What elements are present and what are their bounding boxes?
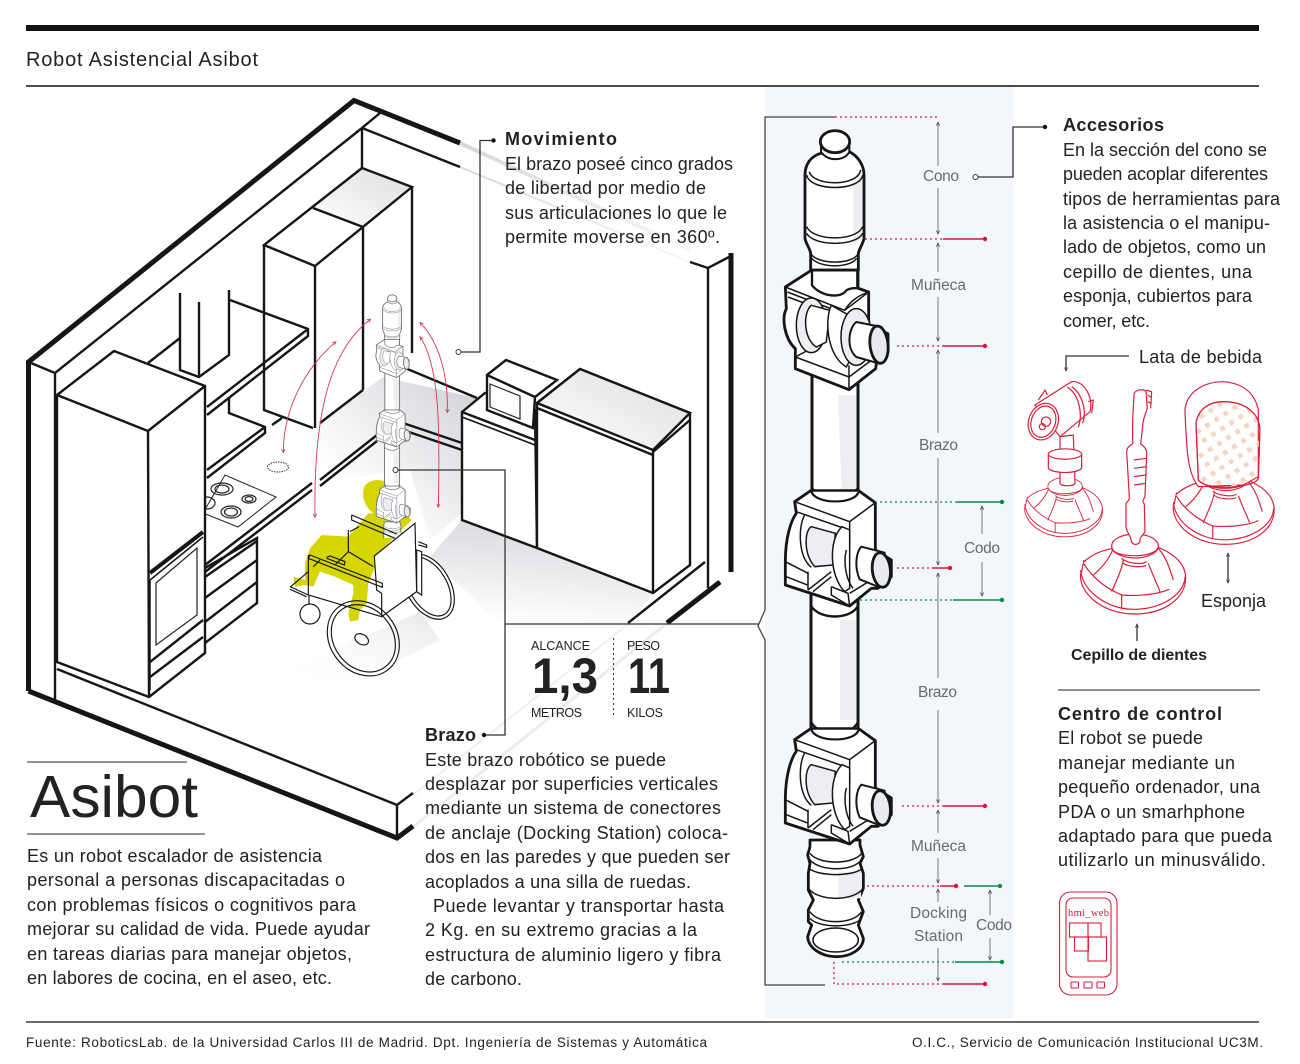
part labels: Cono <box>923 168 959 185</box>
heading: Asibot with intro text <box>27 762 370 988</box>
icon: sponge holder <box>1173 382 1274 544</box>
text block: centro de control: PDA o un smarhphone <box>1058 802 1245 822</box>
text block: brazo: Puede levantar y transportar hasta <box>433 896 725 916</box>
text block: centro de control: El robot se puede <box>1058 728 1203 748</box>
text block: brazo: dos en las paredes y que pueden ser <box>425 847 730 867</box>
part labels: Brazo <box>919 437 958 454</box>
docking station <box>808 840 863 957</box>
joint middle <box>785 491 892 606</box>
part labels: Muñeca <box>911 838 966 855</box>
page title: Robot Asistencial Asibot <box>26 49 258 71</box>
text block: brazo: Brazo <box>425 725 476 745</box>
callout: movimiento: El brazo poseé cinco grados <box>505 154 733 174</box>
text block: brazo: Este brazo robótico se puede <box>425 750 666 770</box>
heading: Asibot with intro text: personal a personas discapacitadas o <box>27 870 345 890</box>
callout: accesorios: Accesorios <box>1063 115 1164 135</box>
callout: accesorios: pueden acoplar diferentes <box>1063 164 1268 184</box>
drawers <box>205 538 257 643</box>
seated person silhouette <box>293 480 412 622</box>
text block: centro de control: Centro de control <box>1058 704 1222 724</box>
back tall cabinet <box>264 168 412 428</box>
callout: movimiento <box>456 129 733 354</box>
heading: Asibot with intro text: con problemas físicos o cognitivos para <box>27 895 357 915</box>
robot arm large <box>784 131 892 957</box>
part labels: Muñeca <box>911 277 966 294</box>
lower arm tube <box>811 575 858 740</box>
callout: accesorios: cepillo de dientes, una <box>1063 262 1253 282</box>
accessory labels with arrows: Cepillo de dientes <box>1071 647 1207 664</box>
text block: brazo: estructura de aluminio ligero y fibra <box>425 945 722 965</box>
movement arrows <box>283 319 447 517</box>
upper arm tube <box>812 370 858 510</box>
cone and wrist <box>805 131 864 298</box>
part labels: Brazo <box>918 684 957 701</box>
panel: robot diagram background <box>765 86 1013 1018</box>
stats: alcance and peso: PESO <box>627 639 660 653</box>
text block: centro de control: manejar mediante un <box>1058 753 1235 773</box>
heading: Asibot with intro text: en tareas diarias para manejar objetos, <box>27 944 352 964</box>
icon: toothbrush holder <box>1081 390 1186 614</box>
part labels <box>910 168 1012 945</box>
header bar <box>26 25 1259 31</box>
footer: Fuente: RoboticsLab. de la Universidad Carlos III de Madrid. Dpt. Ingeniería de Sistemas y Automática <box>26 1035 707 1050</box>
floor shadows <box>290 377 653 685</box>
text block: brazo: de carbono. <box>425 969 522 989</box>
callout: accesorios: comer, etc. <box>1063 311 1150 331</box>
callout: brazo connector <box>393 468 505 737</box>
callout: accesorios: la asistencia o el manipu- <box>1063 213 1270 233</box>
room walls <box>28 100 731 838</box>
heading: Asibot with intro text: Asibot <box>30 764 198 830</box>
footer: O.I.C., Servicio de Comunicación Institucional UC3M. <box>912 1035 1263 1050</box>
hood and shelves <box>148 290 308 478</box>
part labels: Codo <box>976 917 1012 934</box>
text block: brazo: desplazar por superficies verticales <box>425 774 718 794</box>
part labels: Station <box>914 928 963 945</box>
heading: Asibot with intro text: Es un robot escalador de asistencia <box>27 846 323 866</box>
callout: movimiento: Movimiento <box>505 129 617 149</box>
stats: alcance and peso <box>505 624 759 720</box>
icon: smartphone with hmi_web <box>1060 892 1117 995</box>
left tall fridge and oven <box>57 351 205 697</box>
icon: can holder <box>1023 382 1103 537</box>
faded wall lines <box>413 143 690 827</box>
part labels: Codo <box>964 540 1000 557</box>
red and green guide lines <box>834 117 1004 986</box>
stats: alcance and peso: KILOS <box>627 706 663 720</box>
callout: accesorios: lado de objetos, como un <box>1063 237 1266 257</box>
part labels: Docking <box>910 905 967 922</box>
accessories illustrations <box>1023 347 1274 664</box>
callout: movimiento: permite moverse en 360º. <box>505 227 720 247</box>
text block: centro de control <box>1058 690 1273 870</box>
stats: alcance and peso: 1,3 <box>532 648 598 704</box>
text block: brazo: acoplados a una silla de ruedas. <box>425 872 691 892</box>
text block: centro de control: pequeño ordenador, una <box>1058 777 1261 797</box>
icon: smartphone with hmi_web: hmi_web <box>1068 908 1109 919</box>
microwave and right cabinets <box>462 360 690 593</box>
accessory labels with arrows: Esponja <box>1201 591 1267 611</box>
callout: movimiento: de libertad por medio de <box>505 178 706 198</box>
heading: Asibot with intro text: mejorar su calidad de vida. Puede ayudar <box>27 919 370 939</box>
accessory labels with arrows: Lata de bebida <box>1139 347 1263 367</box>
stats: alcance and peso: METROS <box>531 706 582 720</box>
stats: alcance and peso: ALCANCE <box>531 639 590 653</box>
text block: centro de control: utilizarlo un minusválido. <box>1058 850 1266 870</box>
callout: accesorios: En la sección del cono se <box>1063 140 1267 160</box>
text block: brazo <box>425 725 730 989</box>
small robot in scene <box>376 295 410 559</box>
joint lower <box>785 729 892 844</box>
callout: accesorios <box>973 115 1281 331</box>
heading: Asibot with intro text: en labores de cocina, en el aseo, etc. <box>27 968 332 988</box>
counter top with stove <box>199 435 377 572</box>
wheelchair <box>290 515 465 690</box>
footer <box>26 1022 1263 1050</box>
scene: kitchen room with robot <box>28 100 731 838</box>
callout: accesorios: tipos de herramientas para <box>1063 189 1281 209</box>
bracket connector from robot to stats <box>758 117 835 985</box>
callout: movimiento: sus articulaciones lo que le <box>505 203 727 223</box>
stats: alcance and peso: 11 <box>628 648 670 704</box>
joint upper <box>784 270 890 390</box>
accessory labels with arrows <box>1066 347 1267 664</box>
text block: brazo: de anclaje (Docking Station) coloca- <box>425 823 728 843</box>
robot measurement annotations <box>834 117 1012 986</box>
text block: brazo: mediante un sistema de conectores <box>425 798 721 818</box>
axis lines <box>938 122 990 981</box>
text block: brazo: 2 Kg. en su extremo gracias a la <box>425 920 698 940</box>
callout: accesorios: esponja, cubiertos para <box>1063 286 1253 306</box>
text block: centro de control: adaptado para que pueda <box>1058 826 1273 846</box>
